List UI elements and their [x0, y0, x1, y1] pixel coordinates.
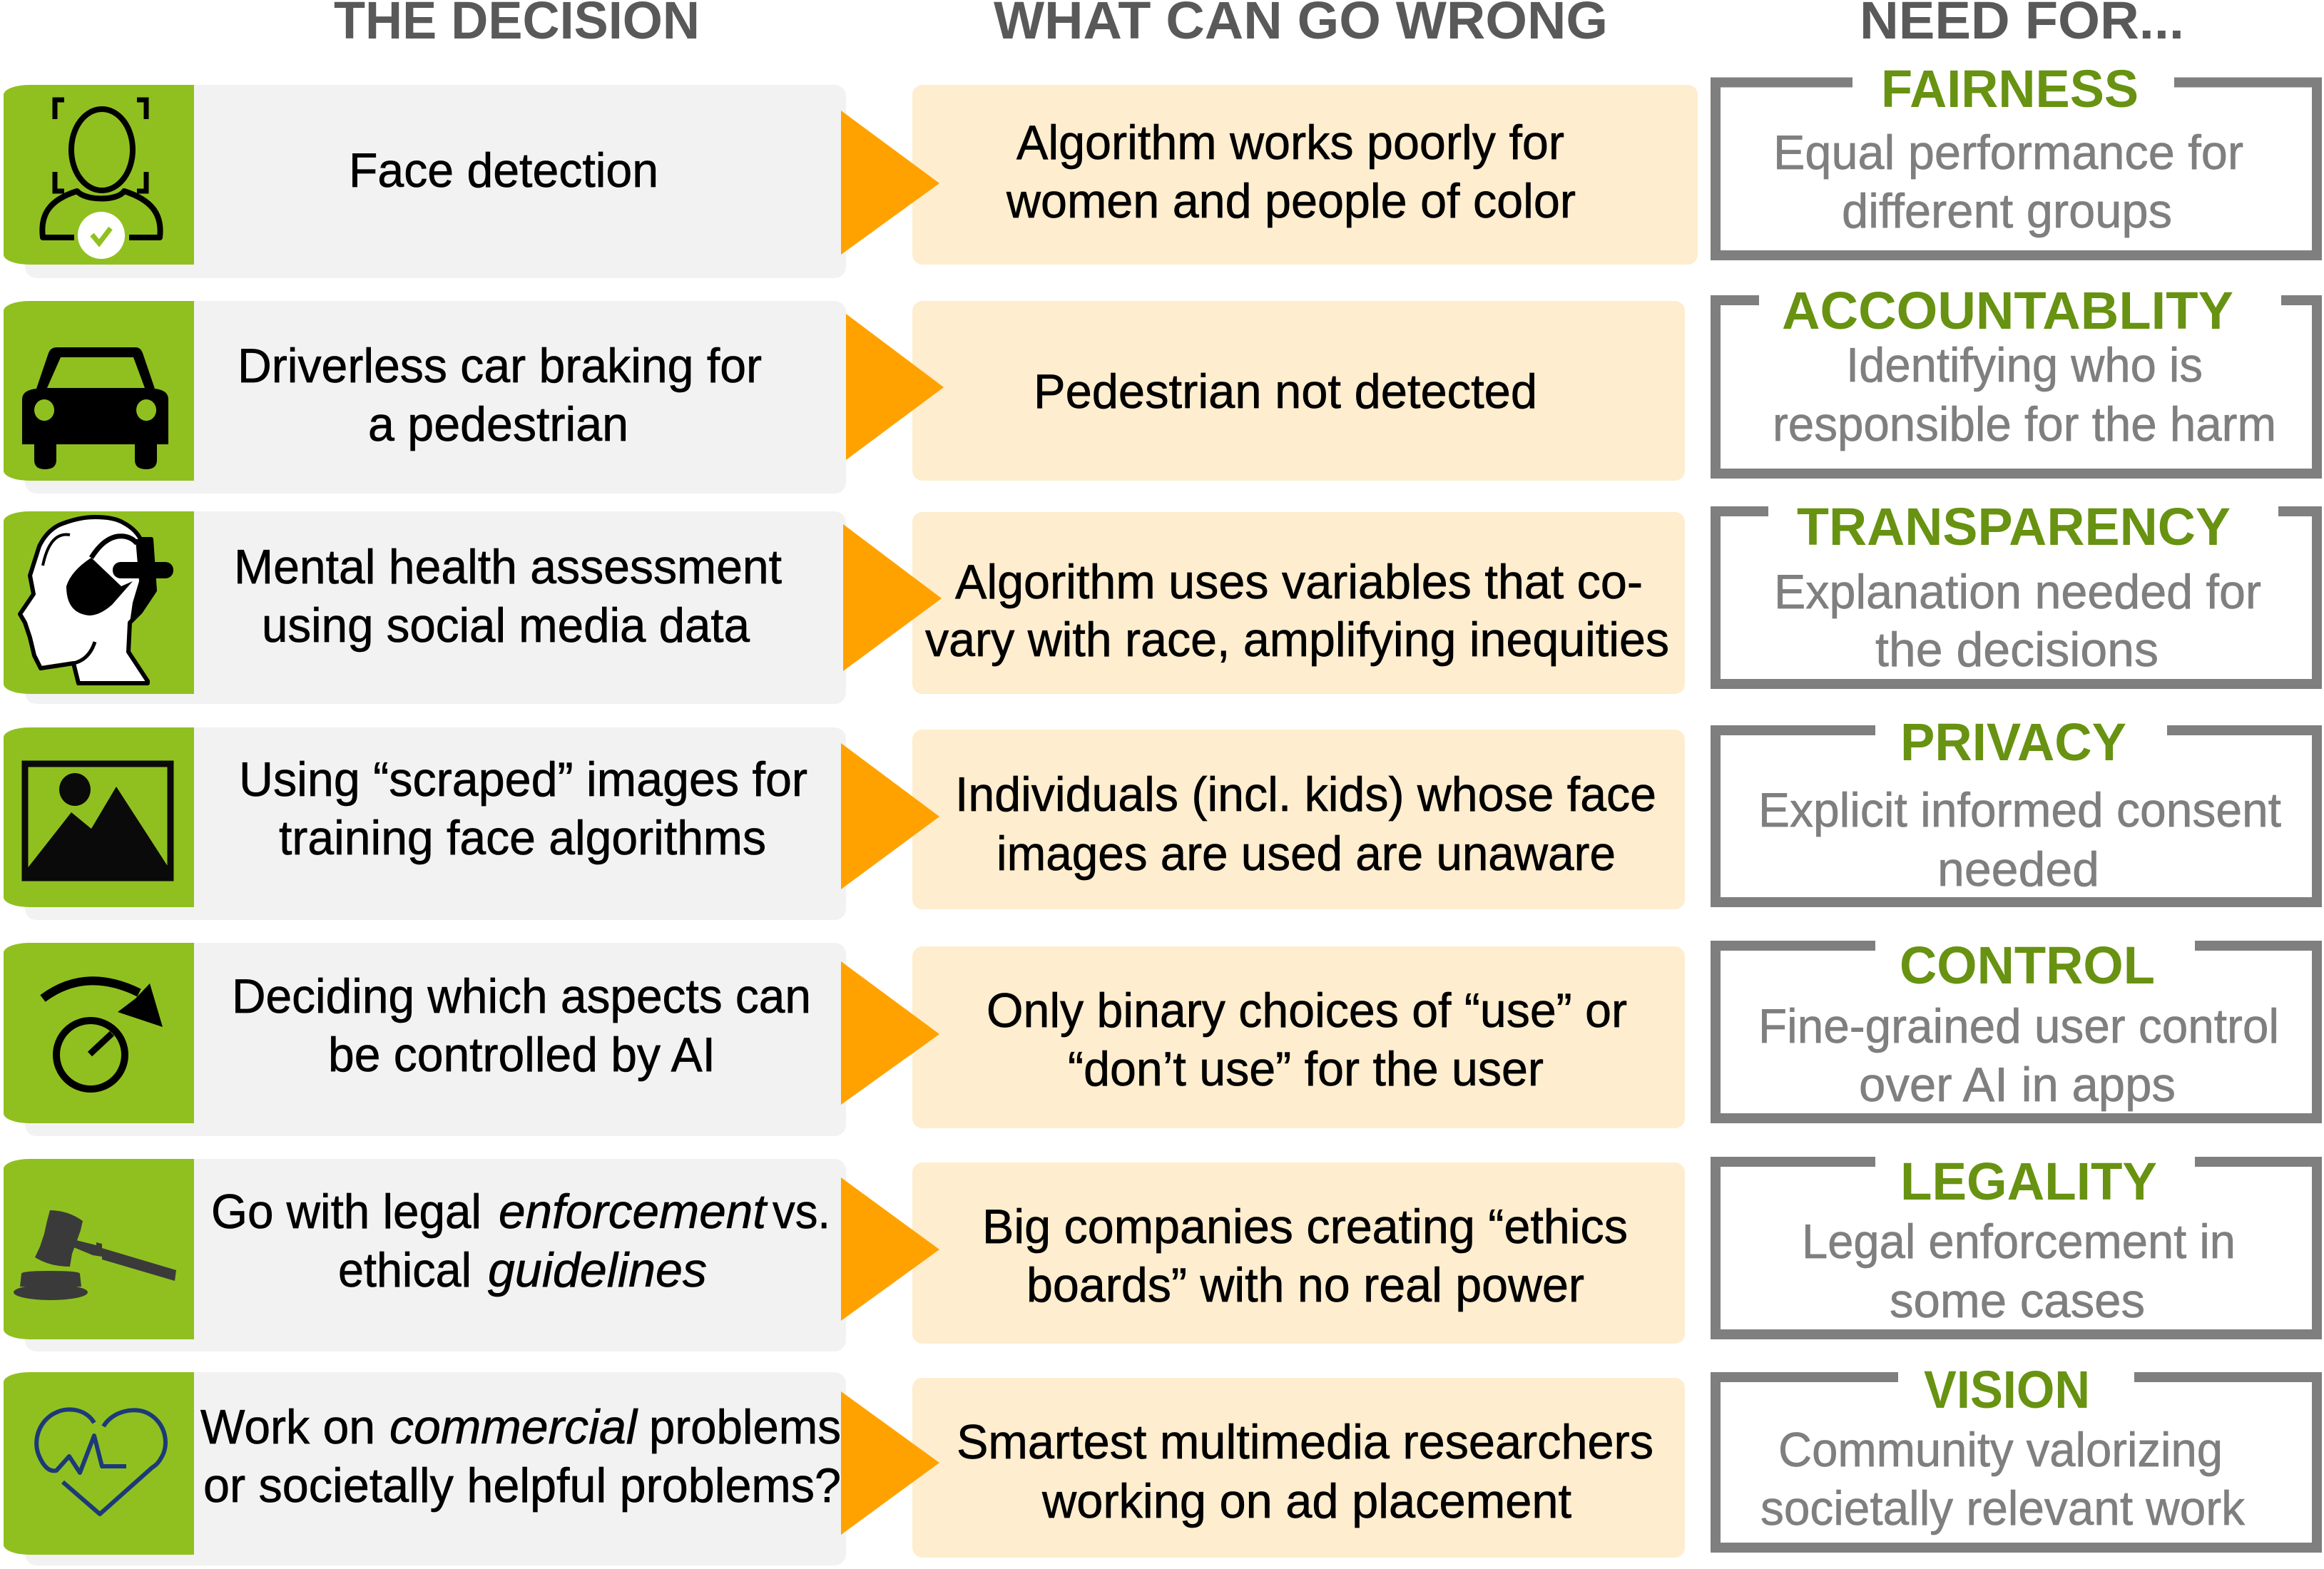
text: vary with race, amplifying inequities — [925, 613, 1669, 667]
icon tile — [4, 727, 194, 907]
frame — [1716, 946, 2317, 1118]
icon: gavel — [14, 1210, 176, 1300]
description: Fine-grained user control — [1758, 999, 2279, 1053]
description — [1774, 565, 2261, 677]
text: societal problems: commercial — [389, 1400, 638, 1454]
description: societally relevant work — [1760, 1481, 2246, 1535]
frame — [1716, 511, 2317, 684]
text: driverless car — [238, 339, 762, 451]
description: Equal performance for — [1773, 126, 2243, 180]
text: legal enforcement: enforcement — [499, 1185, 768, 1239]
text: legal enforcement: vs. — [773, 1185, 830, 1239]
description: Legal enforcement in — [1802, 1215, 2236, 1269]
text: scraped images: training face algorithms — [279, 811, 766, 865]
text: driverless car: a pedestrian — [368, 397, 628, 451]
text: boards” with no real power — [1026, 1258, 1584, 1312]
icon tile — [4, 943, 194, 1123]
panel: legality — [1716, 1152, 2317, 1334]
icon: car — [22, 347, 168, 469]
panel: privacy — [1716, 712, 2317, 902]
title: ACCOUNTABLITY — [1782, 281, 2233, 340]
panel: decision 7 societal problems — [4, 1372, 846, 1565]
text — [955, 767, 1656, 881]
panel: decision 4 scraped images — [4, 727, 846, 920]
panel background — [25, 1372, 846, 1565]
description — [1773, 338, 2276, 451]
icon: face detection — [42, 100, 160, 259]
text — [982, 1200, 1628, 1312]
box — [912, 1162, 1685, 1344]
text: legal enforcement — [211, 1185, 830, 1297]
text — [925, 555, 1669, 667]
text: Big companies creating “ethics — [982, 1200, 1628, 1254]
panel: vision — [1716, 1360, 2317, 1548]
panel background — [25, 511, 846, 704]
description: Community valorizing — [1778, 1423, 2223, 1477]
text: legal enforcement: Go with legal — [211, 1185, 481, 1239]
text: face detection: Face detection — [349, 143, 658, 198]
panel background — [25, 85, 846, 278]
panel: transparency — [1716, 497, 2317, 684]
arrow 3 — [843, 524, 942, 671]
panel: accountability — [1716, 281, 2317, 474]
text: mental health: using social media data — [262, 598, 750, 653]
text: societal problems: problems — [649, 1400, 841, 1454]
description: over AI in apps — [1859, 1058, 2176, 1112]
title: FAIRNESS — [1881, 59, 2139, 118]
frame — [1716, 1162, 2317, 1334]
box — [912, 946, 1685, 1128]
description — [1758, 999, 2279, 1112]
icon: picture — [25, 764, 170, 879]
text — [957, 1415, 1653, 1528]
panel background — [25, 727, 846, 920]
description: needed — [1937, 842, 2099, 896]
arrow 2 — [846, 314, 944, 460]
description — [1802, 1215, 2236, 1328]
box — [912, 85, 1698, 265]
panel: problem 3 — [912, 512, 1685, 694]
text: AI control — [232, 969, 811, 1082]
text: AI control: be controlled by AI — [328, 1028, 715, 1082]
panel: decision 1 face detection — [4, 85, 846, 278]
panel background — [25, 943, 846, 1136]
description — [1760, 1423, 2246, 1535]
panel: problem 1 — [912, 85, 1698, 265]
description — [1773, 126, 2243, 238]
icon tile — [4, 511, 194, 694]
text — [1006, 116, 1576, 228]
title: TRANSPARENCY — [1797, 497, 2231, 556]
arrow 7 — [841, 1391, 939, 1535]
title: LEGALITY — [1900, 1152, 2157, 1211]
frame — [1716, 730, 2317, 902]
title: CONTROL — [1900, 936, 2155, 995]
icon tile — [4, 301, 194, 481]
panel: decision 6 legal enforcement — [4, 1159, 846, 1351]
text: working on ad placement — [1041, 1474, 1571, 1528]
panel: control — [1716, 936, 2317, 1118]
text: driverless car: Driverless car braking for — [238, 339, 762, 393]
text: Smartest multimedia researchers — [957, 1415, 1653, 1469]
panel background — [25, 301, 846, 494]
panel: problem 7 — [912, 1378, 1685, 1558]
text: societal problems: or societally helpful problems? — [203, 1458, 841, 1513]
panel: problem 4 — [912, 730, 1685, 909]
panel: problem 6 — [912, 1162, 1685, 1344]
frame — [1716, 300, 2317, 474]
text: Algorithm works poorly for — [1016, 116, 1564, 170]
arrow 1 — [841, 111, 939, 255]
description: the decisions — [1875, 623, 2159, 677]
text — [987, 983, 1627, 1096]
box — [912, 301, 1685, 481]
arrow 5 — [841, 961, 939, 1105]
text: “don’t use” for the user — [1068, 1042, 1544, 1096]
title: VISION — [1924, 1360, 2090, 1419]
description: Identifying who is — [1846, 338, 2203, 392]
panel: decision 2 driverless car — [4, 301, 846, 494]
panel: fairness — [1716, 59, 2317, 255]
text: Individuals (incl. kids) whose face — [955, 767, 1656, 822]
text: Pedestrian not detected — [1034, 364, 1537, 419]
icon tile — [4, 85, 194, 265]
frame — [1716, 1377, 2317, 1548]
icon: gauge with arrow — [43, 981, 163, 1089]
text: legal enforcement: guidelines — [488, 1243, 707, 1297]
text: Algorithm uses variables that co- — [955, 555, 1643, 609]
panel: problem 5 — [912, 946, 1685, 1128]
description: responsible for the harm — [1773, 397, 2276, 451]
box — [912, 730, 1685, 909]
description: some cases — [1890, 1274, 2145, 1328]
description — [1758, 783, 2281, 896]
title: PRIVACY — [1900, 712, 2126, 772]
panel background — [25, 1159, 846, 1351]
panel: decision 3 mental health — [4, 511, 846, 704]
text: societal problems: Work on — [200, 1400, 375, 1454]
panel: decision 5 AI control — [4, 943, 846, 1136]
icon tile — [4, 1372, 194, 1555]
icon tile — [4, 1159, 194, 1339]
box — [912, 1378, 1685, 1558]
icon: head with pin — [20, 517, 173, 683]
text: images are used are unaware — [997, 827, 1616, 881]
text: societal problems — [200, 1400, 841, 1513]
text: scraped images: Using “scraped” images for — [239, 752, 807, 807]
frame — [1716, 83, 2317, 255]
text: AI control: Deciding which aspects can — [232, 969, 811, 1023]
text: legal enforcement: ethical — [338, 1243, 472, 1297]
description: Explicit informed consent — [1758, 783, 2281, 837]
description: Explanation needed for — [1774, 565, 2261, 619]
arrow 6 — [841, 1177, 939, 1321]
text: Only binary choices of “use” or — [987, 983, 1627, 1038]
arrow 4 — [841, 743, 939, 889]
box — [912, 512, 1685, 694]
description: different groups — [1842, 184, 2172, 238]
icon: heart with pulse — [36, 1409, 165, 1514]
panel: problem 2 — [912, 301, 1685, 481]
text: women and people of color — [1006, 174, 1576, 228]
text: mental health — [234, 540, 782, 653]
text: mental health: Mental health assessment — [234, 540, 782, 594]
text: scraped images — [239, 752, 807, 865]
